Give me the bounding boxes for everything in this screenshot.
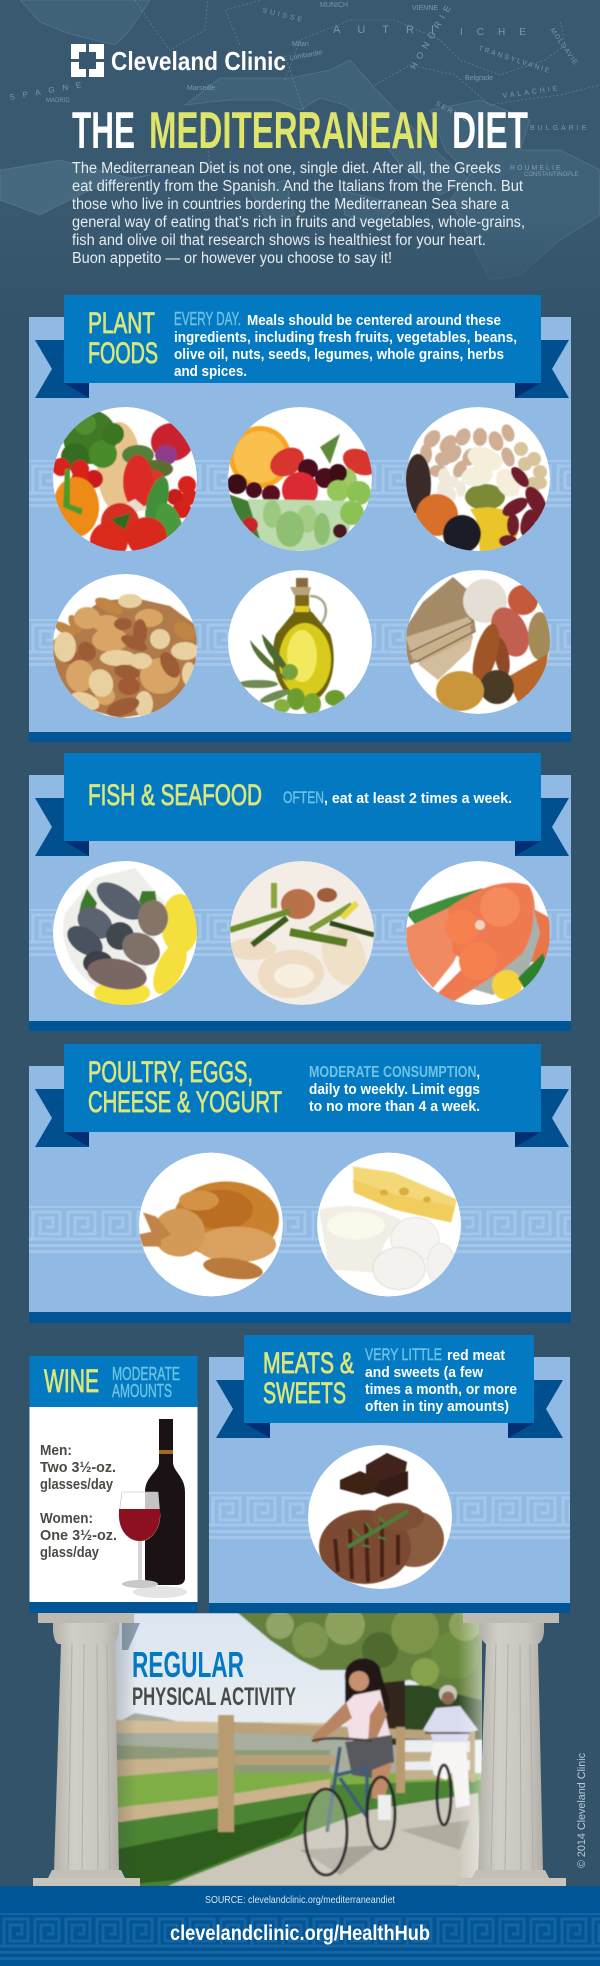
ribbon: meats and sweets bbox=[216, 1335, 563, 1438]
image: mixed nuts bbox=[52, 574, 199, 720]
text: wine amounts: glasses/day bbox=[40, 1476, 114, 1493]
photo: cyclists on path bbox=[113, 1605, 482, 1886]
header map background: Marseille bbox=[187, 85, 215, 92]
source line: SOURCE: clevelandclinic.org/mediterraneandiet bbox=[205, 1894, 395, 1906]
text: moderate amounts: AMOUNTS bbox=[112, 1381, 172, 1401]
text: poultry frequency: to no more than 4 a week. bbox=[309, 1099, 480, 1115]
image: cheese, yogurt and eggs bbox=[317, 1152, 461, 1296]
heading: wine: WINE bbox=[44, 1363, 99, 1399]
left column bbox=[33, 1613, 140, 1886]
illustration: wine bottle and glass bbox=[119, 1419, 187, 1598]
header map background: CONSTANTINOPLE bbox=[524, 172, 579, 178]
website link: clevelandclinic.org/HealthHub bbox=[170, 1922, 430, 1945]
image: calamari bbox=[228, 861, 374, 1005]
text: plant foods description: and spices. bbox=[174, 364, 247, 380]
panel: regular physical activity bbox=[33, 1605, 566, 1886]
header map background: VALACHIE bbox=[502, 85, 561, 100]
text: plant foods description: Meals should be centered around these bbox=[247, 313, 501, 329]
text: meats and sweets frequency: red meat bbox=[447, 1348, 505, 1364]
header map background: HONGRIE bbox=[408, 0, 455, 71]
header map background: BULGARIE bbox=[530, 125, 589, 132]
intro text block: eat differently from the Spanish. And the Italians from the French. But bbox=[72, 178, 524, 195]
heading: meats and sweets bbox=[263, 1347, 354, 1410]
header map background: Lombardie bbox=[289, 49, 323, 62]
second cyclist bbox=[423, 1685, 478, 1825]
header map background: SERVIE bbox=[434, 101, 471, 124]
text: meats and sweets frequency: VERY LITTLE bbox=[365, 1345, 442, 1364]
text: meats and sweets frequency: and sweets (a few bbox=[365, 1365, 484, 1381]
header map background: MADRID bbox=[46, 98, 70, 104]
header map background: AUTRI bbox=[333, 24, 451, 36]
text: fish frequency: OFTEN bbox=[283, 788, 324, 807]
heading: regular physical activity bbox=[132, 1644, 296, 1711]
woman cyclist bbox=[305, 1658, 395, 1875]
intro text block: those who live in countries bordering the Mediterranean Sea share a bbox=[72, 196, 509, 213]
text: meats and sweets frequency bbox=[365, 1345, 517, 1415]
text: poultry frequency bbox=[309, 1064, 480, 1115]
panel: poultry, eggs, cheese and yogurt bbox=[29, 1044, 571, 1323]
header map background: Belgrade bbox=[465, 75, 493, 82]
header map background: MUNICH bbox=[320, 2, 348, 9]
heading: plant foods bbox=[88, 307, 158, 370]
heading: regular physical activity: REGULAR bbox=[132, 1644, 244, 1685]
heading: meats and sweets: MEATS & bbox=[263, 1347, 354, 1380]
text: wine amounts: One 3½-oz. bbox=[40, 1527, 117, 1544]
panel: fish and seafood bbox=[29, 753, 571, 1031]
ribbon: plant foods bbox=[35, 295, 569, 398]
heading: fish and seafood: FISH & SEAFOOD bbox=[88, 779, 262, 812]
header map background bbox=[0, 0, 600, 320]
text: wine amounts: Men: bbox=[40, 1442, 72, 1459]
text: moderate amounts bbox=[112, 1364, 180, 1401]
intro text block bbox=[72, 160, 525, 267]
footer bbox=[0, 1886, 600, 1966]
logo wordmark: Cleveland Clinic bbox=[111, 46, 286, 76]
tree bbox=[238, 1605, 482, 1745]
text: poultry frequency: daily to weekly. Limit eggs bbox=[309, 1082, 480, 1098]
text: wine amounts: Two 3½-oz. bbox=[40, 1459, 116, 1476]
heading: poultry bbox=[88, 1056, 282, 1119]
text: meats and sweets frequency: often in tiny amounts) bbox=[365, 1399, 509, 1415]
header map background: SPAGNE bbox=[9, 79, 90, 102]
image: roast chicken bbox=[139, 1152, 283, 1296]
panel: wine bbox=[30, 1356, 198, 1613]
text: moderate amounts: MODERATE bbox=[112, 1364, 180, 1384]
text: wine amounts: glass/day bbox=[40, 1544, 100, 1561]
title: THE bbox=[72, 102, 135, 160]
icon: cross logo mark bbox=[71, 44, 104, 77]
heading: plant foods: FOODS bbox=[88, 337, 158, 370]
logo: Cleveland Clinic bbox=[71, 44, 286, 77]
heading: plant foods: PLANT bbox=[88, 307, 155, 340]
text: wine amounts: Women: bbox=[40, 1510, 93, 1527]
text: plant foods description: olive oil, nuts, seeds, legumes, whole grains, herbs bbox=[174, 347, 504, 363]
text: plant foods description: ingredients, including fresh fruits, vegetables, beans, bbox=[174, 330, 517, 346]
panel: meats and sweets bbox=[209, 1335, 570, 1613]
intro text block: The Mediterranean Diet is not one, single diet. After all, the Greeks bbox=[72, 160, 501, 177]
image: whole grains bbox=[406, 570, 552, 714]
image: fruit bowl bbox=[227, 407, 381, 551]
text: wine amounts bbox=[40, 1442, 117, 1561]
fence bbox=[113, 1715, 475, 1832]
text: plant foods description: EVERY DAY. bbox=[174, 309, 241, 329]
header map background: MOLDAVIE bbox=[548, 27, 579, 67]
header map background: TRANSYLVANIE bbox=[477, 45, 552, 75]
intro text block: general way of eating that’s rich in fruits and vegetables, whole-grains, bbox=[72, 214, 525, 231]
image: beans and legumes bbox=[405, 407, 551, 553]
ribbon: poultry bbox=[35, 1044, 569, 1147]
header map background: SUISSE bbox=[262, 7, 306, 25]
text: plant foods description bbox=[174, 309, 517, 380]
copyright: © 2014 Cleveland Clinic bbox=[576, 1753, 588, 1868]
text: fish frequency: , eat at least 2 times a week. bbox=[324, 791, 512, 807]
image: herring bbox=[53, 861, 199, 1006]
text: fish frequency bbox=[283, 788, 512, 807]
image: chocolate and steak bbox=[308, 1445, 452, 1589]
header map background: VIENNE bbox=[412, 5, 438, 12]
heading: regular physical activity: PHYSICAL ACTIVITY bbox=[132, 1683, 296, 1711]
image: vegetables bbox=[52, 407, 198, 560]
heading: poultry: CHEESE & YOGURT bbox=[88, 1086, 282, 1119]
right column bbox=[458, 1613, 566, 1886]
title: MEDITERRANEAN bbox=[149, 102, 439, 160]
title: DIET bbox=[452, 102, 528, 160]
header map background: ICHE bbox=[460, 27, 540, 38]
heading: poultry: POULTRY, EGGS, bbox=[88, 1056, 253, 1089]
panel: plant foods bbox=[29, 295, 571, 742]
header map background: ROUMELIE bbox=[510, 165, 563, 172]
text: meats and sweets frequency: times a month, or more bbox=[365, 1382, 517, 1398]
intro text block: Buon appetito — or however you choose to say it! bbox=[72, 250, 392, 267]
header map background: Milan bbox=[292, 41, 309, 48]
image: salmon bbox=[406, 861, 550, 1005]
ribbon: fish and seafood bbox=[35, 753, 569, 856]
intro text block: fish and olive oil that research shows is healthiest for your heart. bbox=[72, 232, 486, 249]
image: olive oil bbox=[228, 570, 372, 715]
heading: meats and sweets: SWEETS bbox=[263, 1377, 346, 1410]
text: poultry frequency: MODERATE CONSUMPTION, bbox=[309, 1064, 480, 1081]
